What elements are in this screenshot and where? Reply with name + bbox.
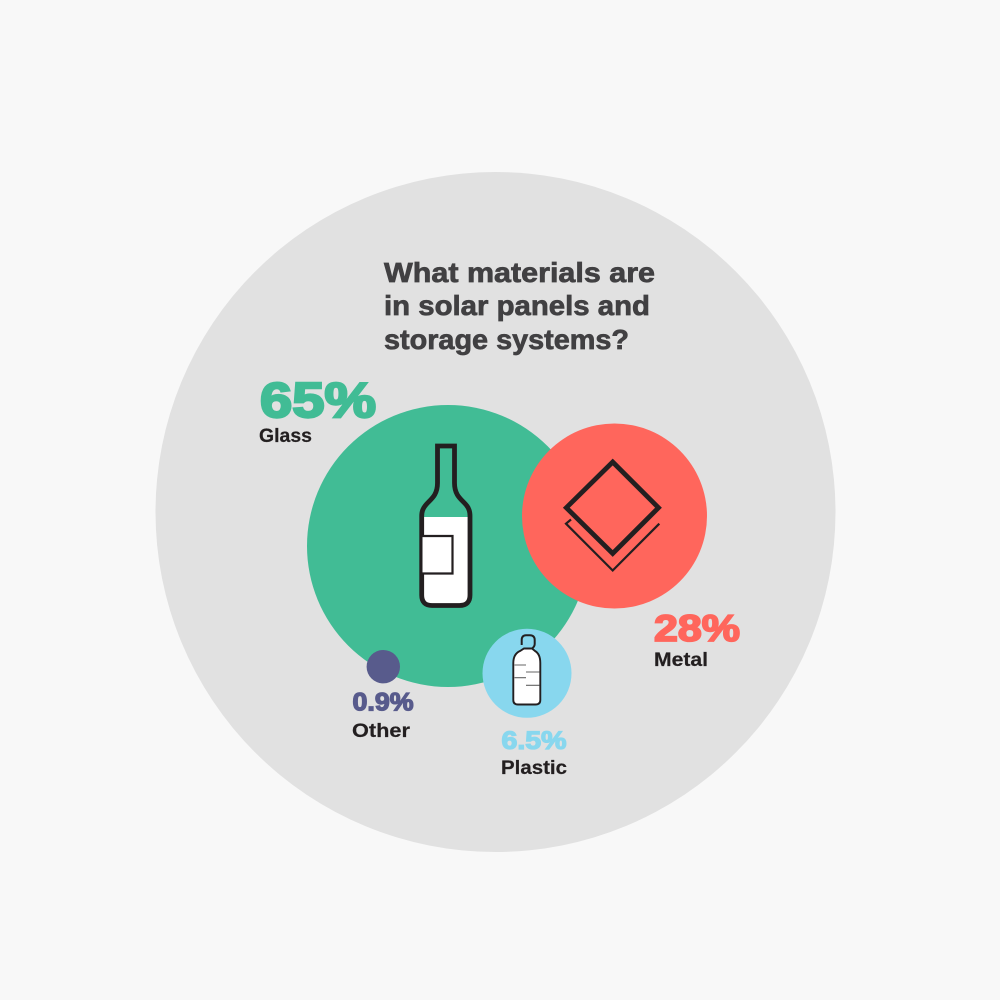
label: glass 65%: 65% (260, 374, 376, 428)
plastic bubble (482, 629, 572, 718)
label: plastic 6.5%: 6.5% (502, 727, 566, 755)
glass bubble (307, 405, 589, 687)
title (384, 257, 655, 355)
label: other 0.9% (352, 688, 414, 742)
icon: glass bottle (422, 446, 470, 606)
label: other 0.9%: 0.9% (352, 688, 414, 716)
icon: plastic bottle (513, 635, 540, 704)
label: plastic 6.5%: Plastic (501, 758, 567, 779)
other bubble (367, 650, 400, 683)
label: metal 28% (654, 608, 740, 671)
metal bubble (522, 424, 707, 608)
label: metal 28%: Metal (654, 650, 708, 671)
title: What materials are (384, 257, 655, 288)
panel: grey background circle (156, 172, 836, 852)
label: glass 65% (259, 374, 376, 447)
label: plastic 6.5% (501, 727, 567, 779)
label: glass 65%: Glass (259, 426, 312, 447)
label: other 0.9%: Other (352, 721, 411, 742)
icon: metal sheets (566, 462, 659, 570)
label: metal 28%: 28% (654, 608, 740, 649)
title: in solar panels and (384, 290, 650, 321)
title: storage systems? (384, 324, 629, 355)
